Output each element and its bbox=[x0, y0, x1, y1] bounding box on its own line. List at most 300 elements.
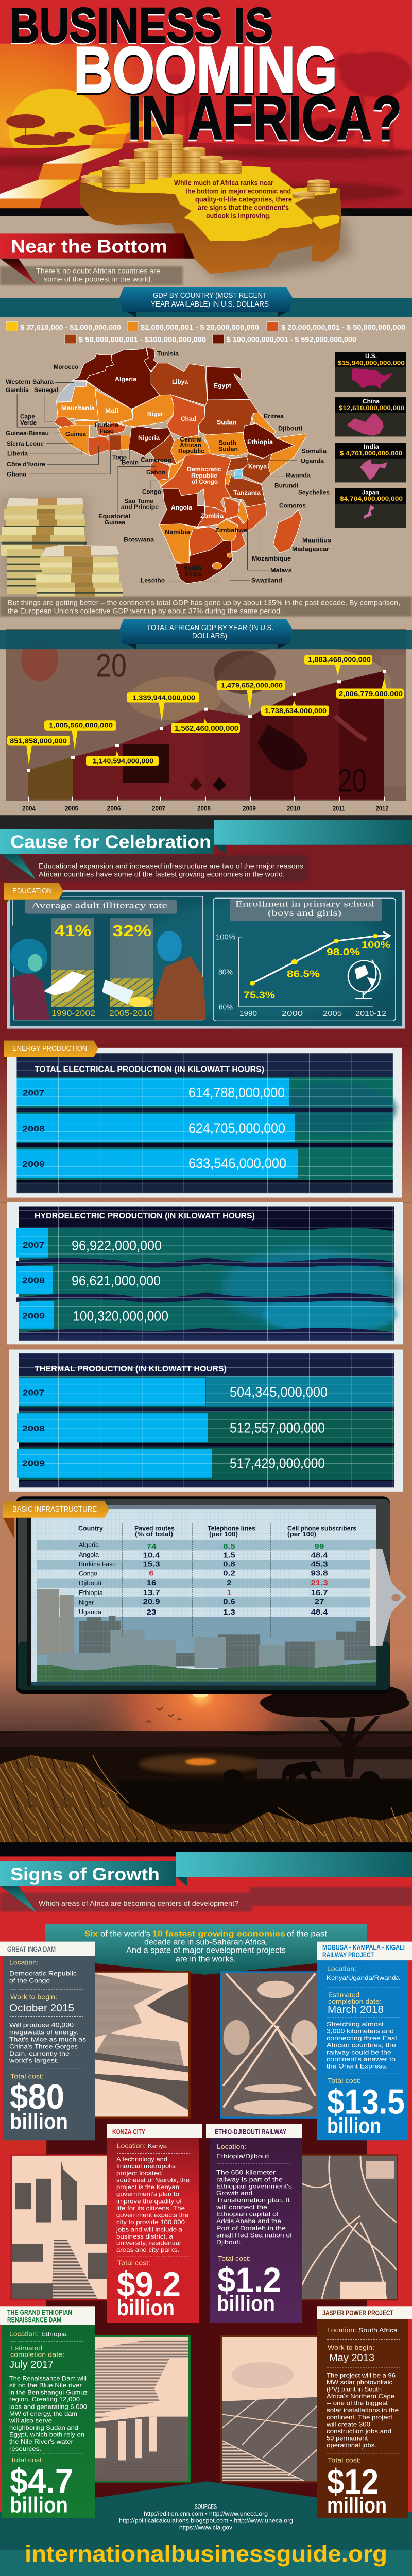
legend: $ 100,000,000,001 - $ 592,000,000,000 bbox=[227, 336, 356, 344]
area series: 20 bbox=[337, 762, 367, 799]
card: Great Inga Dam: Total cost: bbox=[10, 2073, 44, 2080]
card: Great Inga Dam bbox=[0, 1942, 95, 2140]
card: Great Inga Dam: megawatts of energy. bbox=[9, 2028, 78, 2036]
card: Jasper Power Project: Total cost: bbox=[328, 2456, 361, 2464]
section: Near the Bottom heading bbox=[0, 233, 195, 285]
dashed column dividers bbox=[123, 1524, 270, 1636]
panel: education blackboard bbox=[4, 883, 405, 1029]
table values bbox=[143, 1543, 328, 1617]
image: dam engraving bbox=[94, 1971, 191, 2119]
panel: thermal production: THERMAL PRODUCTION (IN KILOWATT HOURS) bbox=[35, 1364, 227, 1374]
card: Konza City: $9.2 bbox=[117, 2265, 181, 2303]
values: 624,705,000,000 bbox=[188, 1121, 285, 1137]
card: Jasper Power Project: solar installations in the bbox=[327, 2406, 399, 2414]
country labels: Eritrea bbox=[264, 413, 284, 420]
comparison box: India: $ 4,761,000,000,000 bbox=[340, 450, 402, 457]
country labels: Guinea bbox=[65, 431, 87, 437]
table header: Country bbox=[78, 1524, 103, 1532]
black divider band bbox=[0, 1842, 412, 1856]
country labels: South bbox=[183, 564, 201, 571]
values: 2008 bbox=[22, 1424, 45, 1433]
table header: (% of total) bbox=[135, 1530, 173, 1538]
year axis labels: 2007 bbox=[152, 805, 165, 812]
country labels: Ethiopia bbox=[247, 438, 273, 446]
section: Cause for Celebration heading bbox=[0, 820, 412, 881]
card: Grand Ethiopian Renaissance Dam: THE GRAND ETHIOPIAN bbox=[7, 2309, 72, 2317]
table values: 13.7 bbox=[143, 1589, 160, 1597]
country labels: Republic bbox=[191, 472, 217, 479]
country labels: Seychelles bbox=[298, 488, 330, 496]
card: Grand Ethiopian Renaissance Dam bbox=[0, 2306, 95, 2518]
card: Grand Ethiopian Renaissance Dam: The Renaissance Dam will bbox=[9, 2375, 87, 2382]
country column: Congo bbox=[79, 1570, 97, 1577]
country column: Algeria bbox=[79, 1541, 99, 1548]
year axis labels: 2011 bbox=[333, 805, 345, 812]
table values: 99 bbox=[315, 1543, 324, 1551]
area series bbox=[28, 671, 384, 800]
year axis labels: 2006 bbox=[107, 805, 121, 812]
lower savanna with wildlife bbox=[0, 1731, 412, 1842]
sources: SOURCES bbox=[195, 2503, 217, 2510]
card: Grand Ethiopian Renaissance Dam: region. Creating 12,000 bbox=[9, 2396, 80, 2403]
card: Jasper Power Project: (PV) plant in South bbox=[327, 2386, 382, 2393]
card: Jasper Power Project: continent. The project bbox=[327, 2414, 392, 2421]
background: energy and infrastructure section bbox=[0, 1046, 412, 1203]
values: 100,320,000,000 bbox=[73, 1309, 168, 1324]
chart: total African GDP by year bbox=[6, 629, 406, 812]
callout: six of ten fastest economies: Six bbox=[84, 1929, 98, 1938]
table values: 8.5 bbox=[223, 1543, 235, 1551]
country labels: Gabon bbox=[146, 469, 165, 476]
values: 504,345,000,000 bbox=[230, 1384, 328, 1400]
card: Jasper Power Project: operational jobs. bbox=[327, 2442, 376, 2449]
callout: six of ten fastest economies bbox=[45, 1924, 367, 1975]
sources: https://www.cia.gov bbox=[179, 2523, 232, 2531]
map of Africa by GDP bbox=[6, 348, 331, 584]
card: Mombasa Kampala Kigali railway: Estimated bbox=[328, 1991, 359, 1998]
country labels: Cape bbox=[20, 413, 35, 420]
card: Konza City: project located bbox=[116, 2170, 162, 2177]
chart: primary enrollment: 1990 bbox=[239, 1010, 257, 1018]
hero intro text: While much of Africa ranks near bbox=[174, 179, 273, 187]
chart: primary enrollment: 75.3% bbox=[244, 990, 275, 1001]
card: Konza City: Location: bbox=[117, 2142, 146, 2149]
country column: Djibouti bbox=[79, 1579, 101, 1587]
country labels: Sudan bbox=[218, 445, 238, 452]
country labels: Tunisia bbox=[157, 350, 179, 357]
chart: adult illiteracy: 32% bbox=[112, 922, 151, 940]
comparison text block bbox=[0, 597, 412, 617]
card: Mombasa Kampala Kigali railway bbox=[317, 1942, 412, 2140]
values: 2009 bbox=[22, 1459, 45, 1468]
sun bbox=[9, 89, 105, 170]
panel: total electrical production: TOTAL ELECTRICAL PRODUCTION (IN KILOWATT HOURS) bbox=[35, 1065, 264, 1074]
card: Konza City: jobs and will include a bbox=[116, 2226, 183, 2233]
value callouts: 1,005,560,000,000 bbox=[49, 722, 113, 729]
man reading bbox=[102, 931, 206, 1020]
card: Jasper Power Project bbox=[317, 2306, 412, 2518]
values: 633,546,000,000 bbox=[188, 1156, 286, 1171]
comparison box: Japan: $4,704,000,000,000 bbox=[340, 495, 403, 502]
card: Ethio-Djibouti Railway: Ethiopian capital of bbox=[216, 2211, 279, 2217]
table stripes bbox=[37, 1540, 376, 1665]
table values: 0.2 bbox=[223, 1570, 235, 1578]
card: Grand Ethiopian Renaissance Dam: $4.7 bbox=[10, 2462, 73, 2501]
value callouts: 1,738,634,000,000 bbox=[265, 707, 327, 715]
table values: 45.3 bbox=[311, 1561, 328, 1568]
card: Konza City: billion bbox=[117, 2296, 175, 2320]
card: Jasper Power Project: Africa's Northern Cape bbox=[327, 2393, 394, 2400]
card: Grand Ethiopian Renaissance Dam: jobs and generating 6,000 bbox=[9, 2403, 87, 2410]
card: Grand Ethiopian Renaissance Dam: MW of energy, the dam bbox=[9, 2410, 77, 2417]
ribbon: total African GDP: DOLLARS) bbox=[192, 632, 227, 640]
black divider band bbox=[0, 208, 412, 216]
values bbox=[22, 1238, 168, 1324]
country labels: Guinea bbox=[105, 519, 126, 526]
year axis labels: 2012 bbox=[376, 805, 389, 812]
country labels: Verde bbox=[20, 419, 37, 426]
hero intro text bbox=[174, 179, 292, 220]
country labels: Equatorial bbox=[98, 513, 130, 520]
card: Jasper Power Project: May 2013 bbox=[329, 2352, 374, 2364]
card: Konza City: Kenya bbox=[148, 2143, 167, 2149]
country labels: of Congo bbox=[192, 478, 218, 485]
hero panel bbox=[0, 0, 412, 210]
card: Jasper Power Project: MW solar photovoltaic bbox=[327, 2379, 392, 2386]
card: Great Inga Dam: China's Three Gorges bbox=[9, 2043, 78, 2050]
chart: adult illiteracy: 2005-2010 bbox=[109, 1009, 153, 1018]
card: Great Inga Dam: GREAT INGA DAM bbox=[7, 1946, 56, 1954]
country labels: Liberia bbox=[7, 450, 28, 457]
card: Konza City: KONZA CITY bbox=[112, 2128, 145, 2136]
chart: primary enrollment: (boys and girls) bbox=[268, 908, 341, 918]
country labels: Comoros bbox=[279, 502, 306, 509]
country labels: Cameroon bbox=[141, 456, 171, 463]
card: Grand Ethiopian Renaissance Dam: neighboring Sudan and bbox=[9, 2424, 78, 2431]
energy bars bbox=[17, 1378, 212, 1478]
data points and ticks bbox=[27, 670, 386, 801]
wildebeest and elephants bbox=[223, 1761, 380, 1781]
values: 2008 bbox=[22, 1276, 45, 1285]
country column: Ethiopia bbox=[79, 1589, 103, 1597]
country labels: Djibouti bbox=[278, 425, 302, 432]
card: Grand Ethiopian Renaissance Dam: billion bbox=[10, 2493, 68, 2517]
card: Mombasa Kampala Kigali railway: the Orient Express. bbox=[327, 2062, 388, 2070]
values: 517,429,000,000 bbox=[230, 1455, 325, 1471]
ribbon: total African GDP: TOTAL AFRICAN GDP BY YEAR (IN U.S. bbox=[147, 624, 273, 632]
birds bbox=[146, 1707, 182, 1722]
year axis labels: 2005 bbox=[65, 805, 78, 812]
wave separators bbox=[16, 1258, 394, 1336]
values: 512,557,000,000 bbox=[230, 1420, 325, 1436]
callout: six of ten fastest economies: of the past bbox=[287, 1929, 327, 1938]
chart: primary enrollment bbox=[213, 898, 396, 1021]
tag: basic infrastructure bbox=[3, 1501, 109, 1539]
card: Konza City bbox=[107, 2124, 202, 2323]
panel: hydroelectric production: HYDROELECTRIC PRODUCTION (IN KILOWATT HOURS) bbox=[35, 1212, 255, 1221]
card: Mombasa Kampala Kigali railway: Total cost: bbox=[328, 2077, 361, 2084]
ribbon: GDP by country: YEAR AVAILABLE) IN U.S. DOLLARS bbox=[151, 300, 269, 309]
image: solar array engraving bbox=[220, 2335, 318, 2483]
card: Great Inga Dam: Will produce 40,000 bbox=[9, 2022, 74, 2028]
value callouts: 1,339,944,000,000 bbox=[132, 694, 195, 701]
card: Mombasa Kampala Kigali railway: billion bbox=[327, 2113, 381, 2138]
card: Ethio-Djibouti Railway: Djibouti. bbox=[216, 2239, 242, 2246]
country labels: Congo bbox=[142, 488, 161, 495]
3D Africa map with coins bbox=[80, 134, 350, 279]
country labels: Uganda bbox=[301, 457, 324, 464]
country labels: Guinea-Bissau bbox=[6, 430, 49, 437]
card: Great Inga Dam: Dam, currently the bbox=[9, 2050, 70, 2057]
chart: primary enrollment: 60% bbox=[219, 1003, 233, 1011]
card: Great Inga Dam: of the Congo bbox=[9, 1977, 50, 1984]
section: Near the Bottom heading: Near the Bottom bbox=[11, 236, 167, 257]
chart: primary enrollment: 2005 bbox=[323, 1010, 342, 1018]
metal clip bbox=[370, 1549, 407, 1646]
value callouts: 2,006,779,000,000 bbox=[339, 690, 403, 698]
country labels: Senegal bbox=[34, 386, 58, 394]
card: Mombasa Kampala Kigali railway: March 2018 bbox=[328, 2003, 384, 2015]
section 2 background bbox=[0, 815, 412, 833]
country labels: Morocco bbox=[54, 363, 78, 370]
intro text: Educational expansion and increased infrastructure are two of the major reasons bbox=[39, 863, 303, 870]
country column: Niger bbox=[79, 1599, 94, 1606]
grass bbox=[0, 1755, 412, 1842]
callout: six of ten fastest economies: of the world's bbox=[100, 1929, 150, 1938]
card: Great Inga Dam: billion bbox=[10, 2109, 68, 2133]
legend: $1,000,000,001 - $ 20,000,000,000 bbox=[141, 324, 259, 331]
table header: (per 100) bbox=[209, 1530, 238, 1538]
table values: 1 bbox=[227, 1589, 232, 1597]
values: 2007 bbox=[23, 1388, 44, 1397]
card: Great Inga Dam: Work to begin: bbox=[10, 1993, 57, 2001]
card: Konza City: business district, a bbox=[116, 2233, 174, 2240]
value callouts: 1,562,460,000,000 bbox=[175, 724, 238, 732]
icon: globe bbox=[348, 960, 380, 999]
country labels: and Principe bbox=[121, 503, 159, 511]
chart: primary enrollment: 80% bbox=[218, 969, 233, 976]
card: Jasper Power Project: Work to begin: bbox=[328, 2344, 374, 2351]
card: Ethio-Djibouti Railway: Ethiopia/Djibouti bbox=[216, 2153, 270, 2160]
card: Grand Ethiopian Renaissance Dam: completion date: bbox=[10, 2351, 64, 2358]
table values: 10.4 bbox=[143, 1552, 160, 1560]
leader lines bbox=[17, 382, 297, 581]
tag: education: EDUCATION bbox=[12, 887, 52, 895]
table values: 15.3 bbox=[143, 1561, 160, 1568]
footer website: internationalbusinessguide.org bbox=[25, 2541, 387, 2567]
card: Konza City: project is the Kenyan bbox=[116, 2183, 179, 2191]
card: Konza City: government expects the bbox=[116, 2211, 188, 2218]
table values: 48.4 bbox=[311, 1552, 328, 1560]
value callouts: 1,140,594,000,000 bbox=[93, 757, 153, 765]
country labels: Angola bbox=[171, 504, 193, 511]
card: Mombasa Kampala Kigali railway: Stretching almost bbox=[327, 2021, 384, 2028]
country labels: Zimbabwe bbox=[215, 527, 247, 534]
card: Jasper Power Project: South Africa bbox=[358, 2327, 398, 2334]
table values: 27 bbox=[315, 1598, 324, 1606]
tag: energy production: ENERGY PRODUCTION bbox=[12, 1045, 87, 1053]
card: Jasper Power Project: -- one of the biggest bbox=[327, 2400, 388, 2406]
country labels: Nigeria bbox=[138, 434, 160, 442]
table values: 21.3 bbox=[311, 1579, 328, 1587]
comparison box: India: India bbox=[364, 443, 380, 450]
values: 2009 bbox=[22, 1160, 45, 1169]
table header bbox=[78, 1524, 356, 1538]
sky and sunset bbox=[0, 1492, 412, 1738]
callout: six of ten fastest economies: And a spate of major development projects bbox=[126, 1946, 286, 1955]
card: Grand Ethiopian Renaissance Dam: Total cost: bbox=[10, 2456, 44, 2464]
card: Jasper Power Project: million bbox=[327, 2493, 387, 2517]
panel: hydroelectric production bbox=[7, 1202, 403, 1344]
table values: 23 bbox=[147, 1608, 157, 1617]
tag: basic infrastructure: BASIC INFRASTRUCTURE bbox=[12, 1505, 97, 1514]
country labels: Democratic bbox=[187, 466, 221, 473]
callout: six of ten fastest economies: are in the works. bbox=[176, 1955, 236, 1963]
card: Mombasa Kampala Kigali railway: Location: bbox=[327, 1965, 356, 1972]
banknote background: 20 bbox=[96, 648, 127, 684]
title bbox=[9, 0, 402, 154]
chart: adult illiteracy: 1990-2002 bbox=[52, 1009, 95, 1018]
country labels: Kenya bbox=[248, 463, 267, 470]
card: Great Inga Dam: October 2015 bbox=[9, 2002, 74, 2014]
country labels: Togo bbox=[112, 454, 127, 461]
footer teal area bbox=[0, 2481, 412, 2576]
card: Grand Ethiopian Renaissance Dam: resources. bbox=[9, 2445, 41, 2452]
panel: thermal production bbox=[9, 1349, 403, 1492]
acacia tree bbox=[260, 1684, 409, 1777]
card: Ethio-Djibouti Railway: Addis Ababa and the bbox=[216, 2217, 281, 2225]
callout: six of ten fastest economies: decade are in sub-Saharan Africa. bbox=[144, 1938, 268, 1946]
comparison box: Japan: Japan bbox=[362, 488, 379, 496]
country labels: Mali bbox=[105, 407, 118, 414]
country labels: Africa bbox=[184, 570, 202, 578]
card: Ethio-Djibouti Railway: railway is part of the bbox=[216, 2176, 283, 2183]
card: Grand Ethiopian Renaissance Dam: the Nile River's water bbox=[9, 2438, 74, 2445]
country labels: South bbox=[218, 439, 236, 446]
image: rail lines engraving bbox=[301, 2154, 398, 2300]
image: dam wall engraving bbox=[94, 2335, 191, 2483]
comparison text block: the European Union's collective GDP went up by about 37% during the same period. bbox=[8, 608, 282, 615]
legend: $ 37,610,000 - $1,000,000,000 bbox=[20, 324, 121, 331]
country labels: Tanzania bbox=[233, 489, 261, 496]
ribbon: GDP by country bbox=[0, 287, 412, 317]
country labels: Gambia bbox=[6, 386, 29, 394]
image: Konza city engraving bbox=[10, 2154, 108, 2300]
table header: Paved routes bbox=[134, 1524, 175, 1532]
card: Konza City: life for its citizens. The bbox=[116, 2205, 185, 2212]
tag: education bbox=[4, 883, 63, 904]
country labels: African bbox=[180, 442, 201, 449]
card: Ethio-Djibouti Railway: The 650-kilometer bbox=[216, 2168, 276, 2176]
intro text: Which areas of Africa are becoming centers of development? bbox=[39, 1900, 238, 1908]
comparison box: India bbox=[335, 443, 406, 482]
values bbox=[22, 1085, 286, 1171]
country labels: Sudan bbox=[217, 419, 236, 426]
ribbon: total African GDP bbox=[0, 619, 412, 649]
hero intro text: are signs that the continent's bbox=[198, 205, 289, 212]
card: Grand Ethiopian Renaissance Dam: will also serve bbox=[9, 2417, 52, 2424]
card: Konza City: southeast of Nairobi, the bbox=[116, 2177, 190, 2183]
legend bbox=[6, 322, 405, 344]
woman reading bbox=[10, 939, 87, 1020]
comparison box: China bbox=[335, 397, 406, 436]
card: Grand Ethiopian Renaissance Dam: July 2017 bbox=[9, 2358, 54, 2370]
country labels: Chad bbox=[181, 415, 196, 422]
table header: Telephone lines bbox=[208, 1524, 255, 1532]
card: Great Inga Dam: That's twice as much as bbox=[9, 2036, 86, 2043]
card: Great Inga Dam: world's largest. bbox=[9, 2057, 59, 2064]
values: 96,922,000,000 bbox=[72, 1238, 162, 1253]
country labels: Faso bbox=[100, 428, 114, 434]
country labels: Namibia bbox=[165, 528, 191, 535]
card: Jasper Power Project: will create 300 bbox=[326, 2420, 370, 2428]
country labels: Algeria bbox=[115, 376, 137, 383]
clipboard: basic infrastructure table bbox=[3, 1496, 407, 1694]
year axis labels: 2008 bbox=[197, 805, 211, 812]
table values: 6 bbox=[149, 1570, 154, 1578]
country labels: Egypt bbox=[214, 382, 232, 389]
trees on the horizon bbox=[139, 52, 412, 153]
section: Signs of Growth heading: Signs of Growth bbox=[10, 1865, 160, 1885]
table values: 1.3 bbox=[223, 1608, 235, 1617]
country labels bbox=[6, 350, 331, 584]
background: tan paper bbox=[0, 216, 412, 817]
country labels: Benin bbox=[122, 459, 139, 466]
table values: 93.8 bbox=[311, 1570, 328, 1578]
chart: primary enrollment: 98.0% bbox=[327, 947, 360, 958]
year axis labels: 2009 bbox=[243, 805, 256, 812]
image: railway crossing bbox=[220, 1971, 318, 2119]
card: Konza City: financial metropolis bbox=[116, 2163, 176, 2170]
country column: Burkina Faso bbox=[79, 1560, 116, 1568]
card: Ethio-Djibouti Railway: Port of Doraleh in the bbox=[216, 2225, 286, 2232]
section: Cause for Celebration heading: Cause for Celebration bbox=[10, 833, 211, 852]
chart: primary enrollment: 86.5% bbox=[287, 969, 320, 979]
title: BUSINESS IS bbox=[9, 0, 273, 55]
card: Ethio-Djibouti Railway: small Red Sea nation of bbox=[216, 2231, 292, 2239]
comparison box: Japan bbox=[335, 488, 406, 528]
card: Mombasa Kampala Kigali railway: Kenya/Uganda/Rwanda bbox=[327, 1974, 400, 1981]
values: 2007 bbox=[23, 1241, 44, 1250]
country labels: Sao Tome bbox=[124, 497, 153, 504]
card: Mombasa Kampala Kigali railway: connecting three East bbox=[327, 2035, 397, 2042]
legend: $ 50,000,000,001 - $100,000,000,000 bbox=[79, 336, 206, 344]
card: Konza City: government's plan to bbox=[116, 2191, 179, 2197]
country labels: Sierra Leone bbox=[7, 440, 44, 447]
card: Grand Ethiopian Renaissance Dam: Location: bbox=[9, 2330, 39, 2337]
card: Great Inga Dam: $80 bbox=[10, 2077, 64, 2116]
value callouts bbox=[7, 655, 404, 766]
card: Mombasa Kampala Kigali railway: 3,000 kilometers and bbox=[327, 2028, 394, 2035]
card: Ethio-Djibouti Railway: Growth and bbox=[216, 2190, 252, 2197]
country labels: Western Sahara bbox=[6, 378, 54, 385]
comparison box: U.S.: U.S. bbox=[365, 352, 377, 360]
values: 96,621,000,000 bbox=[72, 1273, 161, 1289]
card: Ethio-Djibouti Railway: will connect the bbox=[216, 2204, 267, 2211]
card: Konza City: university, residential bbox=[116, 2240, 181, 2246]
value callouts: 851,858,000,000 bbox=[10, 737, 67, 744]
country labels: Mauritius bbox=[302, 537, 331, 544]
table values: 48.4 bbox=[311, 1608, 328, 1617]
table values: 1.5 bbox=[223, 1552, 235, 1560]
sources: http://edition.cnn.com • http://www.uneca.org bbox=[144, 2510, 268, 2517]
country labels: Burundi bbox=[274, 482, 298, 489]
card: Jasper Power Project: 50 permanent bbox=[327, 2434, 368, 2442]
country labels: Madagascar bbox=[292, 546, 329, 552]
values bbox=[22, 1384, 328, 1471]
card: Mombasa Kampala Kigali railway: completion date: bbox=[328, 1997, 382, 2005]
hero intro text: outlook is improving. bbox=[206, 213, 271, 220]
